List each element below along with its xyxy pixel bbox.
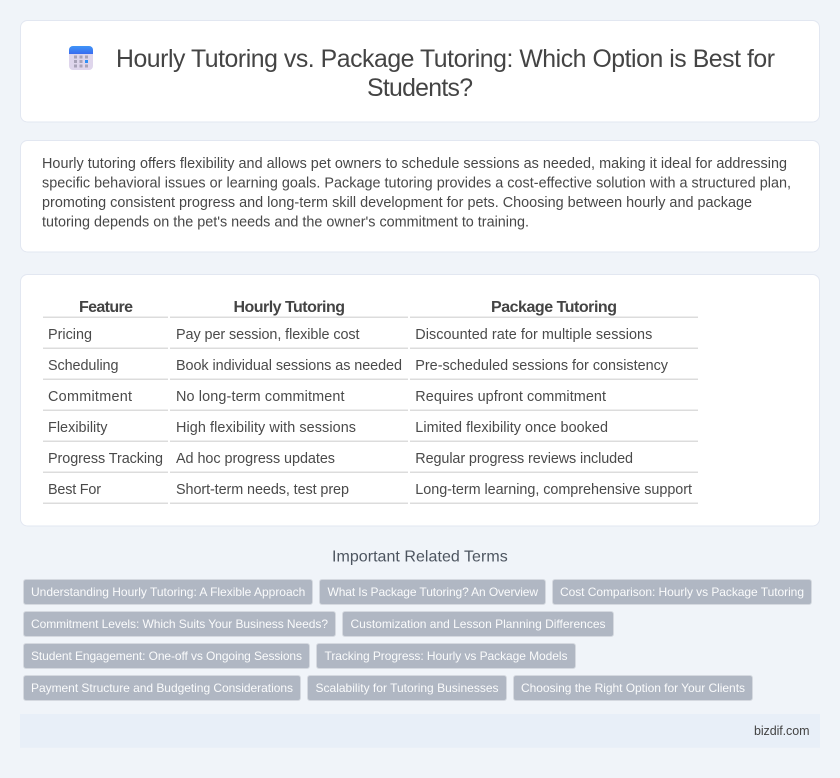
table header row: Feature	[79, 299, 133, 316]
table header row: Hourly Tutoring	[234, 299, 345, 316]
tag	[316, 644, 576, 668]
title: Hourly Tutoring vs. Package Tutoring: Which Option is Best for	[116, 46, 775, 73]
tag: Student Engagement: One-off vs Ongoing Sessions	[31, 649, 302, 663]
table row: commitment	[43, 389, 698, 411]
tag: Customization and Lesson Planning Differences	[350, 617, 606, 631]
tag	[552, 580, 812, 604]
heading: important related terms: Important Related Terms	[332, 549, 508, 566]
table row: commitment: Requires upfront commitment	[415, 389, 606, 405]
tag: Payment Structure and Budgeting Considerations	[31, 681, 293, 695]
text block: introduction: Hourly tutoring offers flexibility and allows pet owners to schedule sessions as needed, making it ideal for addressing	[42, 156, 787, 172]
table row: progress tracking: Regular progress reviews included	[415, 451, 633, 467]
tag	[24, 612, 336, 636]
tag	[24, 644, 310, 668]
table row: flexibility: High flexibility with sessions	[176, 420, 356, 436]
tag: Tracking Progress: Hourly vs Package Models	[324, 649, 568, 663]
title	[116, 46, 775, 102]
panel: comparison table	[20, 274, 820, 526]
table row: best for	[43, 482, 698, 504]
tag: What Is Package Tutoring? An Overview	[328, 585, 538, 599]
table row: scheduling: Scheduling	[48, 358, 118, 374]
tag: Choosing the Right Option for Your Clients	[521, 681, 745, 695]
tag: Commitment Levels: Which Suits Your Business Needs?	[31, 617, 328, 631]
table row: flexibility: Flexibility	[48, 420, 108, 436]
text block: introduction	[42, 156, 791, 230]
table row: best for: Long-term learning, comprehensive support	[415, 482, 692, 498]
table row: best for: Short-term needs, test prep	[176, 482, 349, 498]
icon: calendar	[69, 46, 93, 70]
table row: pricing	[43, 327, 698, 349]
tag	[24, 676, 300, 700]
text block: introduction: tutoring depends on the pet's needs and the owner's commitment to training.	[42, 214, 529, 230]
tag	[308, 676, 506, 700]
table row: scheduling: Pre-scheduled sessions for consistency	[415, 358, 669, 374]
title: Students?	[367, 75, 473, 102]
tag list: related terms	[24, 580, 812, 700]
table row: pricing: Pricing	[48, 327, 92, 343]
table row: progress tracking: Ad hoc progress updates	[176, 451, 335, 467]
panel: title header	[20, 20, 820, 122]
text block: introduction: specific behavioral issues or learning goals. Package tutoring provides a cost-effective solution with a structured plan,	[42, 176, 791, 192]
tag: Cost Comparison: Hourly vs Package Tutoring	[560, 585, 804, 599]
table header row	[43, 299, 698, 318]
table row: flexibility	[43, 420, 698, 442]
tag: Understanding Hourly Tutoring: A Flexible Approach	[31, 585, 305, 599]
footer	[20, 714, 820, 748]
table row: scheduling: Book individual sessions as needed	[176, 358, 402, 374]
tag	[24, 580, 312, 604]
tag: Scalability for Tutoring Businesses	[316, 681, 498, 695]
table row: pricing: Discounted rate for multiple sessions	[415, 327, 652, 343]
tag	[514, 676, 752, 700]
table row: progress tracking: Progress Tracking	[48, 451, 163, 467]
text block: introduction: promoting consistent progress and long-term skill development for pets. Choosing between hourly and package	[42, 195, 752, 211]
table header row: Package Tutoring	[491, 299, 617, 316]
table row: pricing: Pay per session, flexible cost	[176, 327, 360, 343]
table row: flexibility: Limited flexibility once booked	[415, 420, 608, 436]
tag	[320, 580, 546, 604]
table row: best for: Best For	[48, 482, 101, 498]
table row: scheduling	[43, 358, 698, 380]
table row: commitment: Commitment	[48, 389, 132, 405]
table row: commitment: No long-term commitment	[176, 389, 344, 405]
footer source text: bizdif.com	[754, 724, 810, 738]
panel: introduction	[20, 140, 820, 252]
tag	[342, 612, 614, 636]
table row: progress tracking	[43, 451, 698, 473]
